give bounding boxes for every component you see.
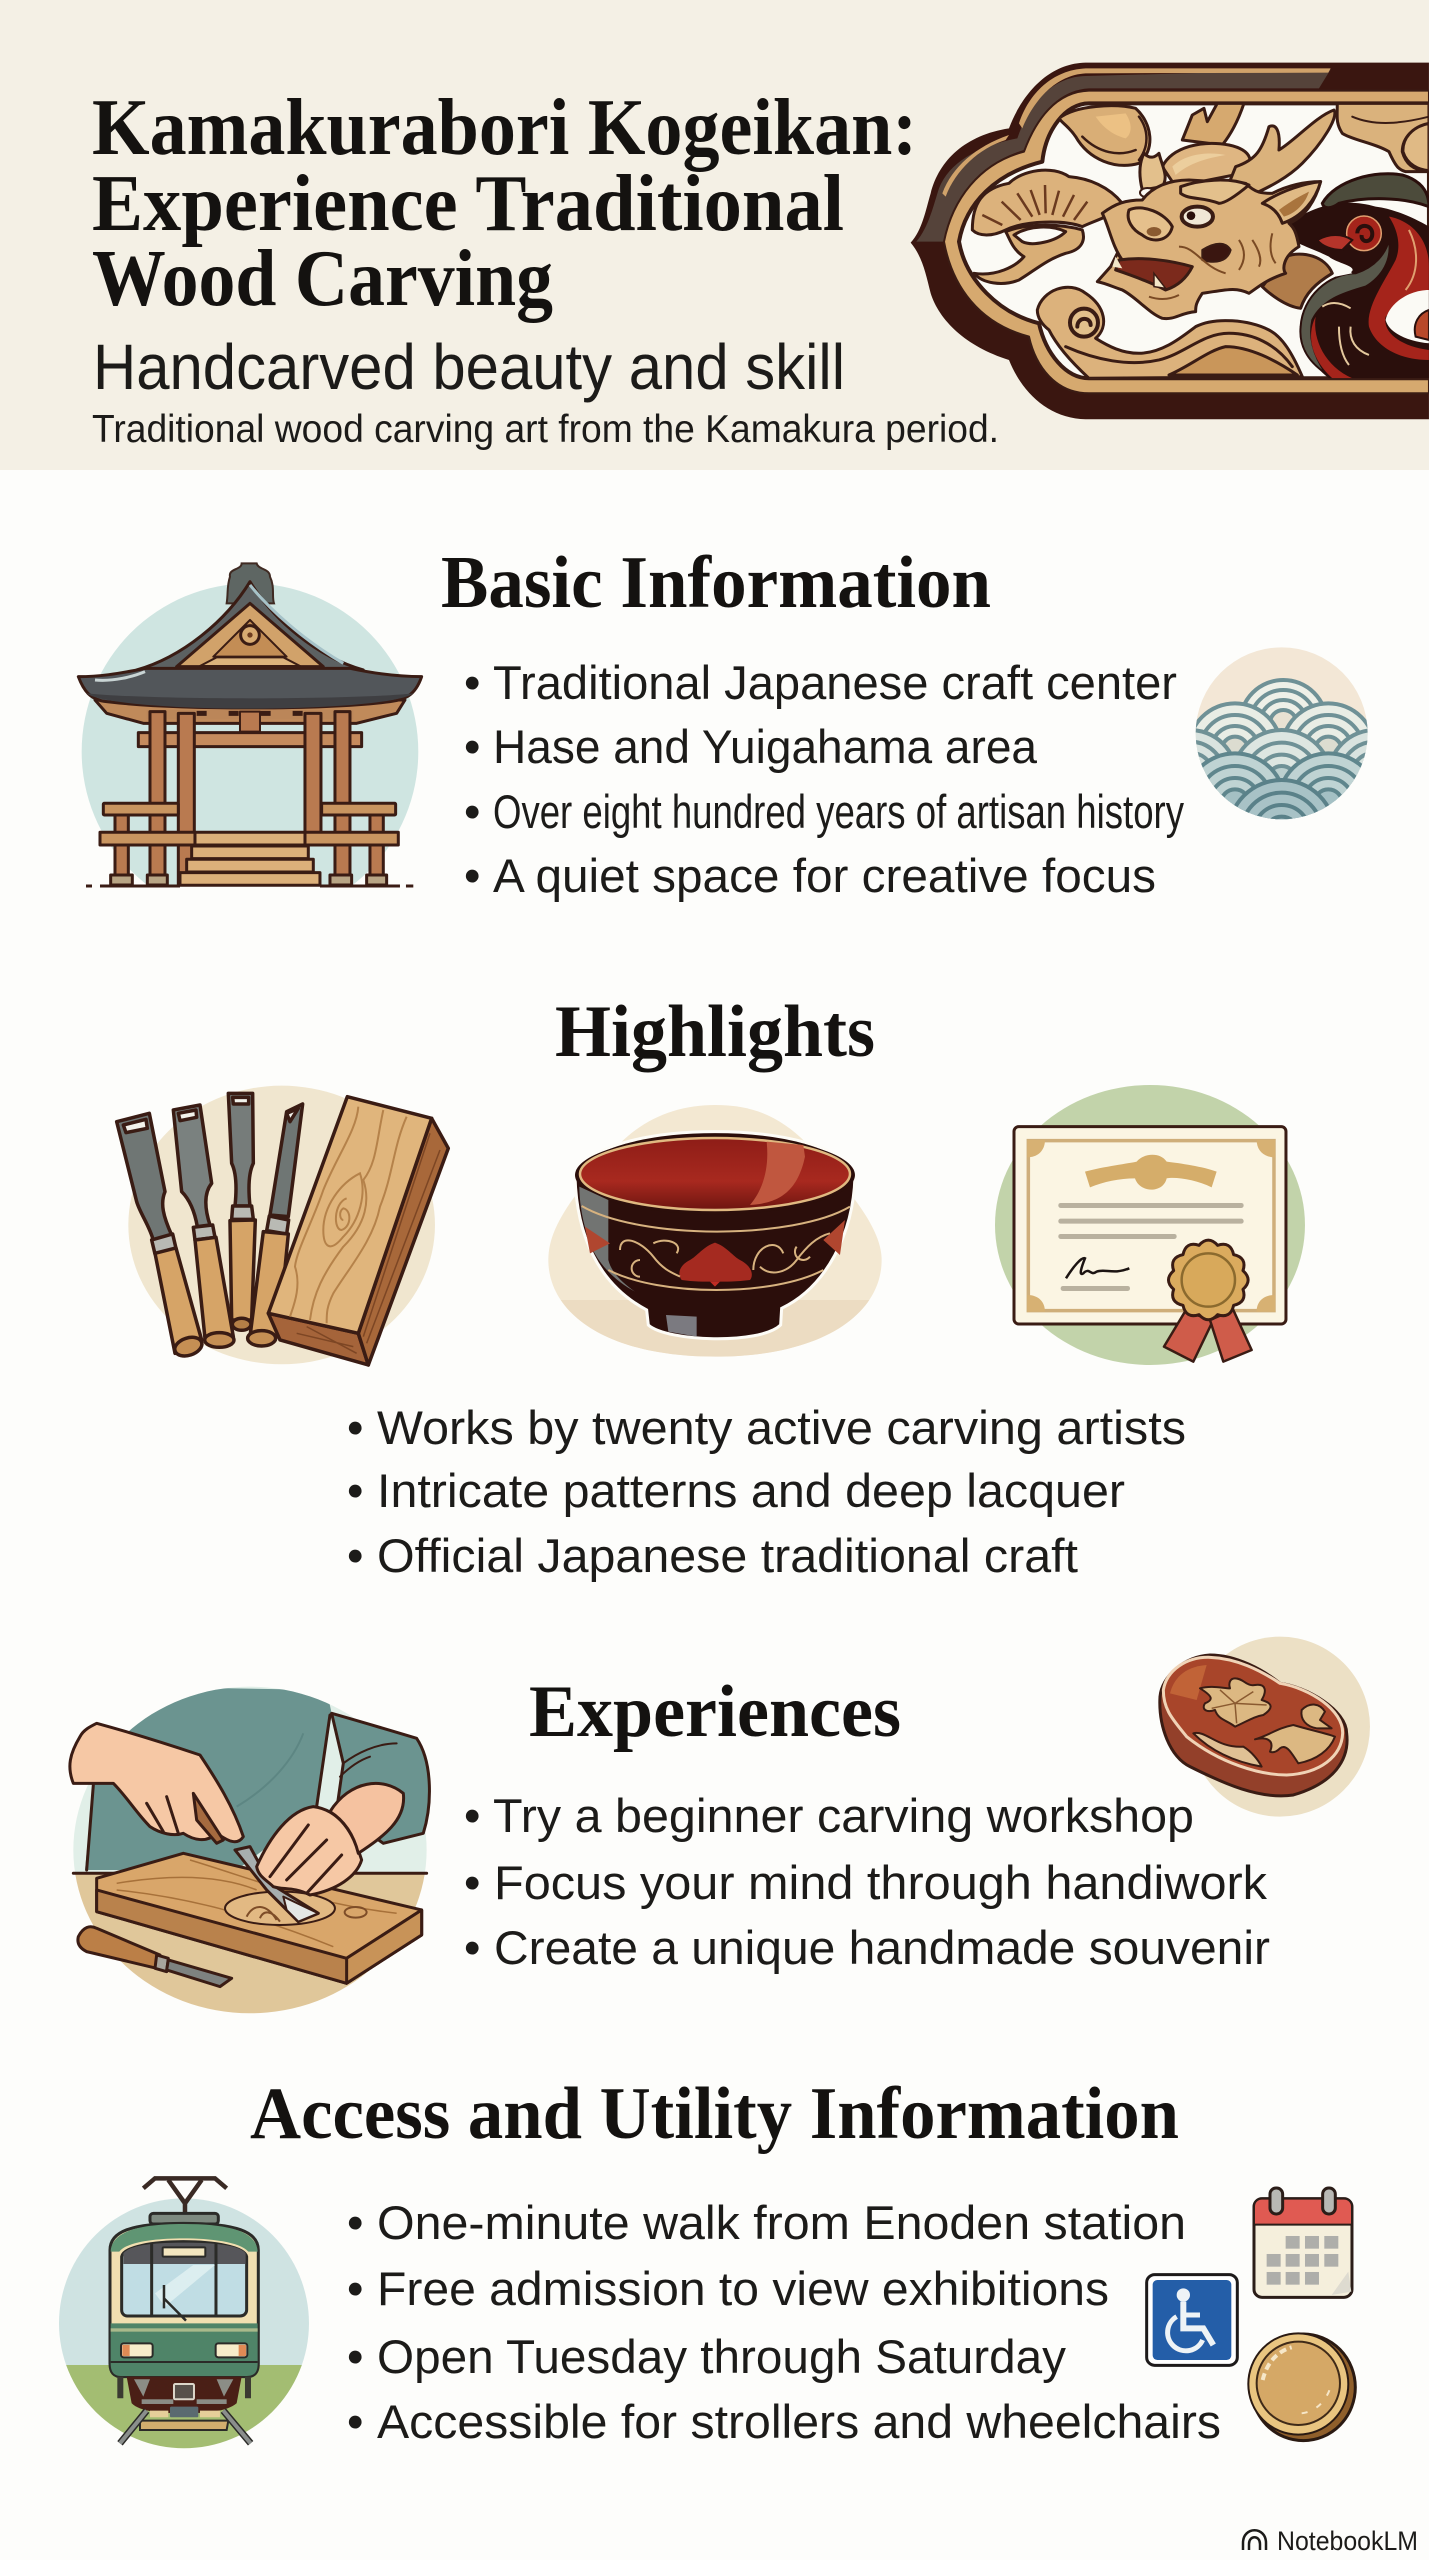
heading: Access and Utility Information: Access and Utility Information bbox=[250, 2073, 1179, 2155]
list: access bullets: • bbox=[347, 2395, 363, 2448]
right upper scroll bbox=[1337, 103, 1429, 172]
list: highlights bullets: • bbox=[347, 1529, 363, 1582]
list: basic information bullets: Over eight hundred years of artisan history bbox=[493, 785, 1184, 838]
bottom waves bbox=[1037, 287, 1302, 378]
icon: carved dragon panel bbox=[911, 63, 1429, 419]
pine fan bbox=[974, 225, 1083, 283]
panel: Highlights bbox=[117, 991, 1305, 1582]
list: highlights bullets bbox=[347, 1401, 1186, 1582]
panel: Access and Utility Information bbox=[40, 2073, 1418, 2556]
list: experiences bullets: Create a unique handmade souvenir bbox=[494, 1921, 1270, 1974]
list: highlights bullets: Intricate patterns and deep lacquer bbox=[377, 1464, 1125, 1517]
icon: gold coin bbox=[1248, 2333, 1355, 2441]
icon: shrine pavilion bbox=[78, 563, 422, 920]
list: basic information bullets: • bbox=[464, 656, 480, 709]
header band bbox=[0, 0, 1429, 470]
list: basic information bullets: • bbox=[464, 785, 480, 838]
list: access bullets: • bbox=[347, 2196, 363, 2249]
list: access bullets: Free admission to view exhibitions bbox=[377, 2262, 1109, 2315]
title: Experience Traditional bbox=[92, 160, 844, 248]
panel: Experiences bbox=[50, 1637, 1370, 2041]
neck bbox=[1262, 254, 1332, 308]
list: basic information bullets bbox=[464, 656, 1184, 902]
list: access bullets: One-minute walk from Enoden station bbox=[377, 2196, 1186, 2249]
title: Wood Carving bbox=[92, 235, 553, 323]
list: experiences bullets: Focus your mind through handiwork bbox=[494, 1856, 1268, 1909]
back antler bbox=[1182, 103, 1244, 145]
logo: NotebookLM: NotebookLM bbox=[1277, 2526, 1418, 2556]
list: access bullets: Open Tuesday through Saturday bbox=[377, 2330, 1067, 2383]
list: access bullets: • bbox=[347, 2262, 363, 2315]
list: experiences bullets: • bbox=[464, 1921, 480, 1974]
icon: calendar bbox=[1254, 2188, 1352, 2297]
list: highlights bullets: • bbox=[347, 1401, 363, 1454]
title: Kamakurabori Kogeikan: bbox=[92, 84, 917, 172]
icon: Enoden train bbox=[59, 2176, 309, 2448]
heading: Highlights: Highlights bbox=[555, 991, 875, 1073]
list: experiences bullets bbox=[464, 1789, 1270, 1974]
dark body bbox=[1286, 203, 1429, 378]
face bbox=[1097, 180, 1321, 319]
list: access bullets: • bbox=[347, 2330, 363, 2383]
icon: carved lacquer tray bbox=[1160, 1637, 1370, 1817]
list: basic information bullets: Hase and Yuigahama area bbox=[493, 720, 1038, 773]
top cloud scroll bbox=[1059, 106, 1150, 165]
icon: chisels and wood block bbox=[117, 1086, 448, 1365]
list: basic information bullets: A quiet space for creative focus bbox=[493, 849, 1156, 902]
list: access bullets bbox=[347, 2196, 1221, 2448]
title bbox=[92, 84, 917, 323]
icon: hands carving wood bbox=[68, 1686, 431, 2014]
list: experiences bullets: Try a beginner carving workshop bbox=[493, 1789, 1194, 1842]
head dome and horn bbox=[1162, 143, 1250, 187]
list: basic information bullets: • bbox=[464, 720, 480, 773]
icon: certificate with seal bbox=[995, 1085, 1305, 1365]
list: highlights bullets: Official Japanese traditional craft bbox=[377, 1529, 1078, 1582]
list: basic information bullets: • bbox=[464, 849, 480, 902]
icon: NotebookLM mark bbox=[1243, 2530, 1266, 2550]
heading: Basic Information: Basic Information bbox=[441, 542, 991, 624]
list: access bullets: Accessible for strollers and wheelchairs bbox=[377, 2395, 1221, 2448]
panel: Basic Information bbox=[76, 554, 1368, 902]
icon: lacquer bowl bbox=[540, 1105, 890, 1367]
list: experiences bullets: • bbox=[464, 1856, 480, 1909]
list: highlights bullets: Works by twenty active carving artists bbox=[377, 1401, 1186, 1454]
tagline: Traditional wood carving art from the Kamakura period. bbox=[92, 408, 999, 451]
subtitle: Handcarved beauty and skill bbox=[93, 331, 845, 403]
icon: seigaiha waves bbox=[1196, 647, 1368, 820]
list: basic information bullets: Traditional Japanese craft center bbox=[493, 656, 1177, 709]
icon: wheelchair access sign bbox=[1147, 2275, 1237, 2365]
list: highlights bullets: • bbox=[347, 1464, 363, 1517]
heading: Experiences: Experiences bbox=[529, 1671, 901, 1753]
list: experiences bullets: • bbox=[464, 1789, 480, 1842]
